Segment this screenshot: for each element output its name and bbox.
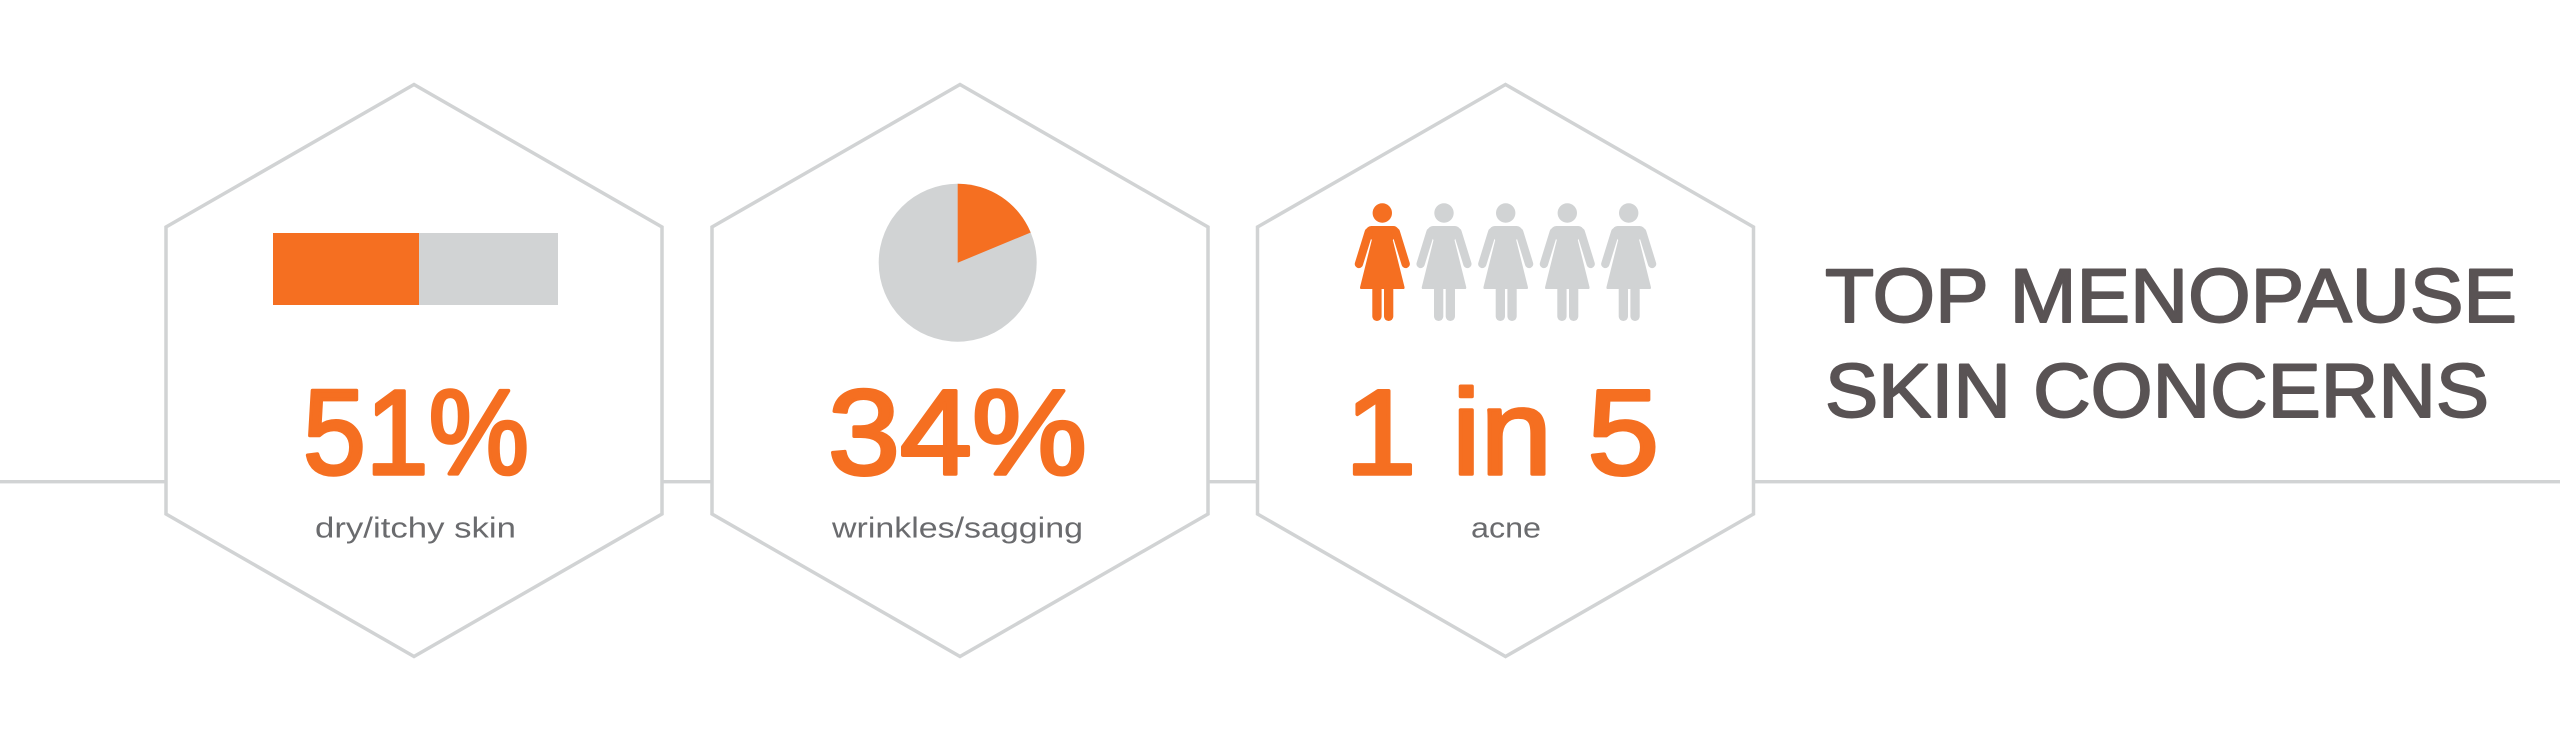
icon: woman grey 3	[1544, 203, 1591, 321]
statistic: 34%: 34%	[828, 364, 1087, 500]
icon: woman grey 2	[1482, 203, 1529, 321]
title	[1825, 254, 2517, 434]
panel: acne	[1258, 84, 1754, 656]
label: acne: acne	[1471, 513, 1541, 545]
icon: woman highlighted	[1359, 203, 1406, 321]
icon: woman grey 4	[1605, 203, 1652, 321]
bar chart: 51 percent	[273, 233, 558, 305]
label: dry/itchy skin: dry/itchy skin	[315, 513, 516, 545]
hexagon outline 2	[712, 84, 1208, 656]
pictogram: one in five women	[1359, 203, 1652, 321]
hexagon outline 1	[166, 84, 662, 656]
panel: wrinkles/sagging	[712, 84, 1208, 656]
label: wrinkles/sagging: wrinkles/sagging	[831, 513, 1083, 545]
title line 1: TOP MENOPAUSE	[1825, 254, 2517, 339]
statistic: 51%: 51%	[303, 364, 529, 500]
icon: woman grey 1	[1421, 203, 1467, 321]
title line 2: SKIN CONCERNS	[1825, 349, 2489, 434]
panel: dry/itchy skin	[166, 84, 662, 656]
pie chart: 34 percent	[879, 184, 1037, 342]
hexagon outline 3	[1258, 84, 1754, 656]
statistic: 1 in 5: 1 in 5	[1345, 364, 1659, 500]
